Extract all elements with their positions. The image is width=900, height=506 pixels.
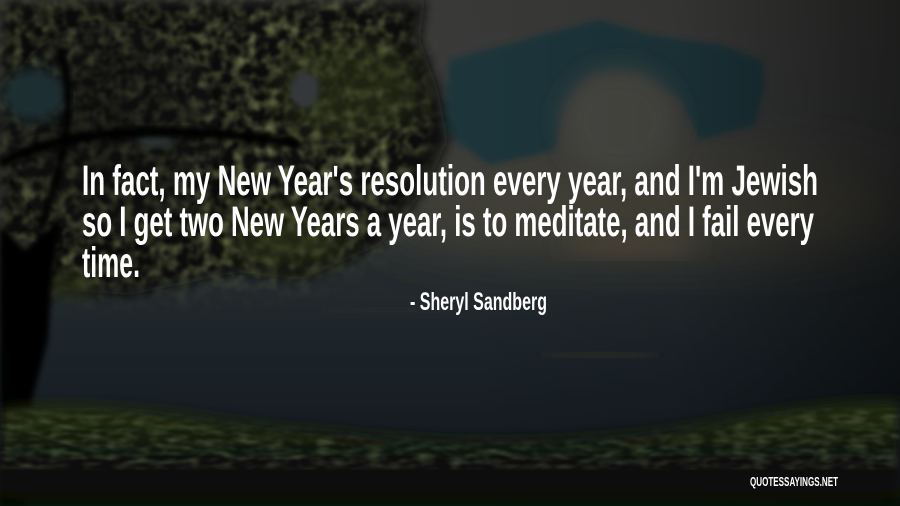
quote text	[82, 157, 818, 287]
background: grass foreground	[0, 402, 900, 506]
background: tree trunk	[0, 215, 62, 506]
watermark: QUOTESSAYINGS.NET	[750, 475, 838, 489]
background: tree canopy	[0, 0, 448, 320]
quote text: time.	[82, 239, 140, 287]
attribution: - Sheryl Sandberg	[410, 288, 547, 316]
